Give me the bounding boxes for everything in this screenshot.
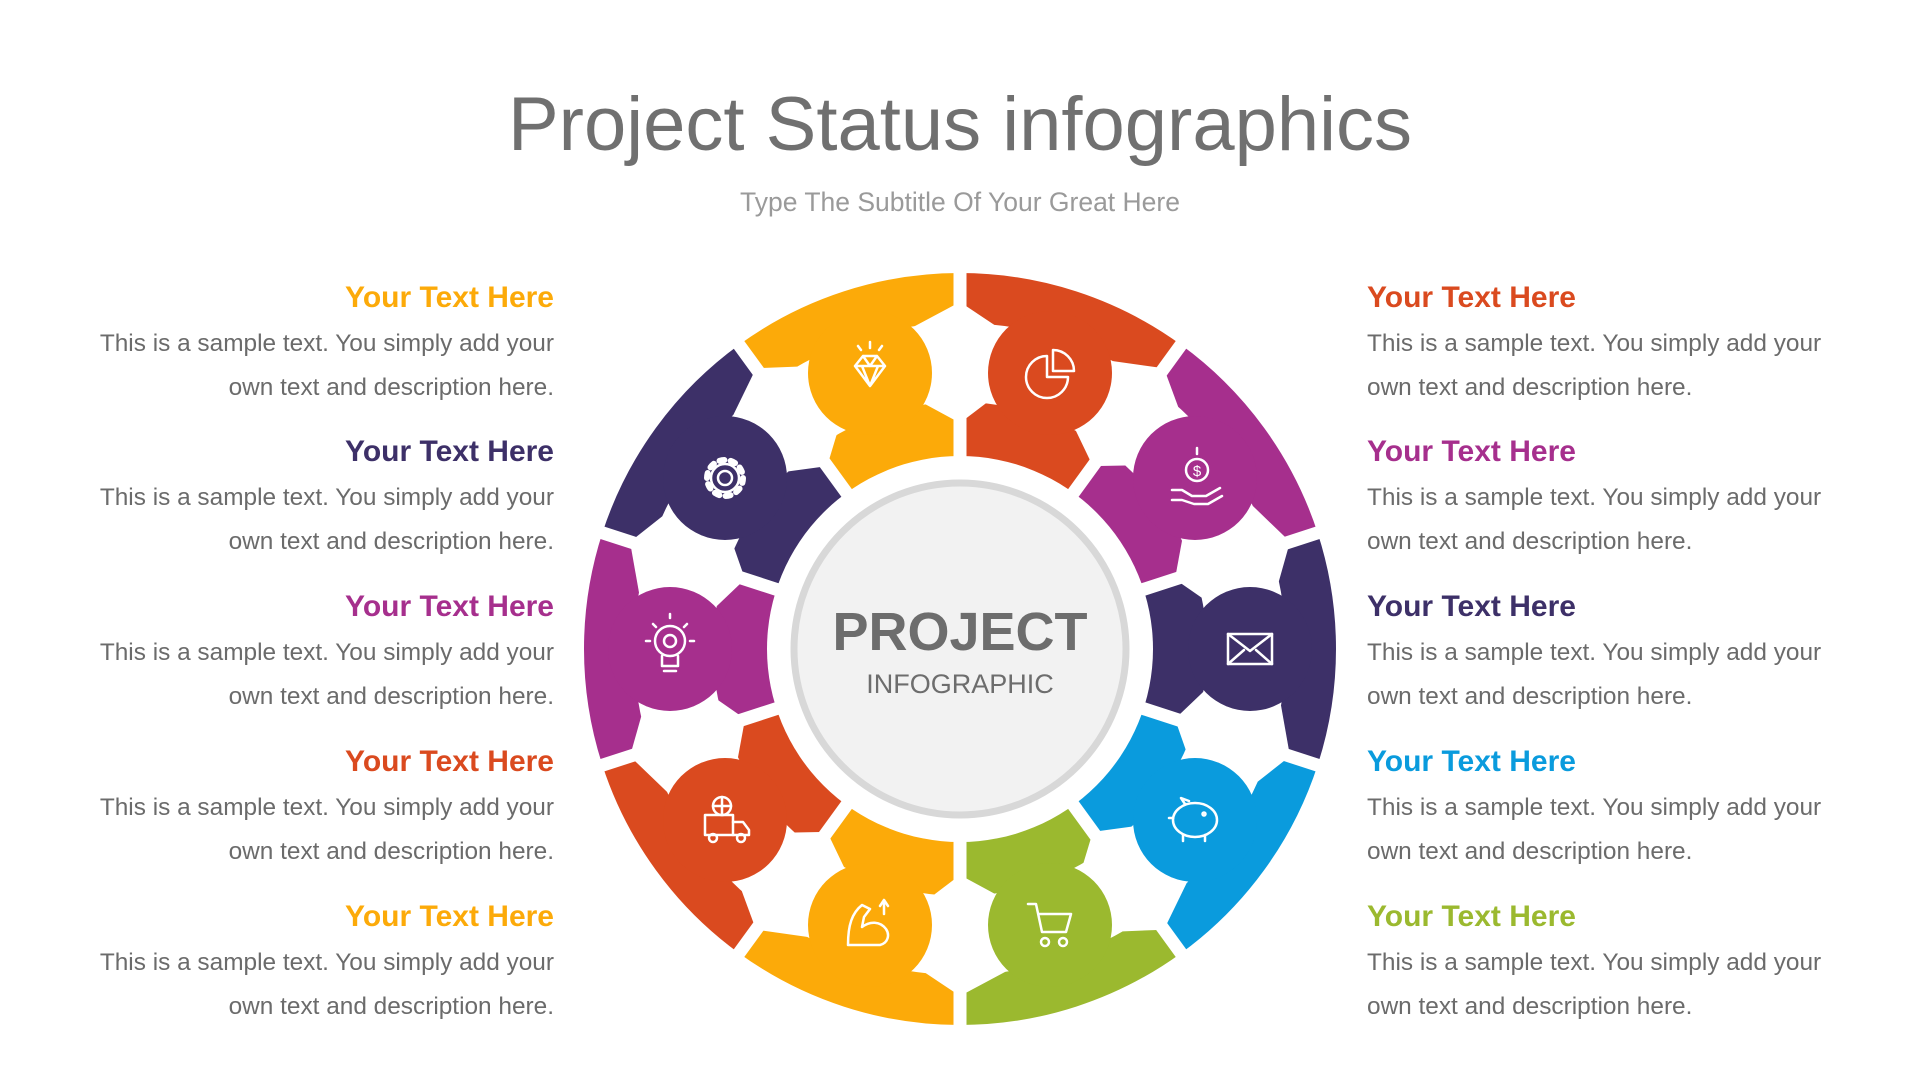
icon: muscle arm [848,900,888,945]
text block right 3: Your Text Here [1367,590,1576,623]
text block left 3: own text and description here. [229,683,554,710]
text block left 3: This is a sample text. You simply add your [100,639,554,666]
title: Project Status infographics [508,82,1412,167]
text block right 4: own text and description here. [1367,838,1692,865]
text block right 5: own text and description here. [1367,993,1692,1020]
text block right 3: own text and description here. [1367,683,1692,710]
text block right 3 [1367,590,1821,710]
icon: lightbulb gear [646,614,694,671]
text block right 1: Your Text Here [1367,281,1576,314]
white arrows between segments [599,302,1321,996]
segment sectors [534,215,1386,1080]
icon: shopping cart [1028,904,1071,946]
icon: envelope [1228,634,1272,664]
text block right 2: own text and description here. [1367,528,1692,555]
text block right 4: Your Text Here [1367,745,1576,778]
text block right 5 [1367,900,1821,1020]
subtitle: Type The Subtitle Of Your Great Here [740,187,1180,217]
text block left 5: Your Text Here [345,900,554,933]
text block left 2 [100,435,554,555]
text block left 1 [100,281,554,401]
text block right 5: This is a sample text. You simply add your [1367,949,1821,976]
text block right 2: This is a sample text. You simply add your [1367,484,1821,511]
text block right 4 [1367,745,1821,865]
text block right 5: Your Text Here [1367,900,1576,933]
text block left 2: This is a sample text. You simply add your [100,484,554,511]
text block left 1: Your Text Here [345,281,554,314]
text block left 1: own text and description here. [229,374,554,401]
text block left 4: own text and description here. [229,838,554,865]
text block left 4: This is a sample text. You simply add your [100,794,554,821]
icon: money hand [1172,448,1222,504]
icon: gear [707,460,743,496]
icon: piggy bank [1169,798,1217,841]
icon: money hand: $ [1193,463,1202,480]
text block right 1: own text and description here. [1367,374,1692,401]
icon: diamond [855,342,885,386]
text block left 5: This is a sample text. You simply add your [100,949,554,976]
text block left 3 [100,590,554,710]
text block left 5: own text and description here. [229,993,554,1020]
text block right 1: This is a sample text. You simply add your [1367,330,1821,357]
text block right 3: This is a sample text. You simply add your [1367,639,1821,666]
text block right 2: Your Text Here [1367,435,1576,468]
text block left 5 [100,900,554,1020]
center circle [794,483,1126,815]
icon circles [608,311,1312,987]
text block left 4: Your Text Here [345,745,554,778]
text block right 4: This is a sample text. You simply add your [1367,794,1821,821]
icon: delivery truck [705,797,749,842]
text block right 2 [1367,435,1821,555]
text block left 4 [100,745,554,865]
text block left 2: Your Text Here [345,435,554,468]
center circle: PROJECT [832,602,1088,662]
text block left 1: This is a sample text. You simply add your [100,330,554,357]
icon: pie chart [1026,350,1074,398]
text block left 3: Your Text Here [345,590,554,623]
center circle: INFOGRAPHIC [866,669,1054,699]
text block left 2: own text and description here. [229,528,554,555]
text block right 1 [1367,281,1821,401]
